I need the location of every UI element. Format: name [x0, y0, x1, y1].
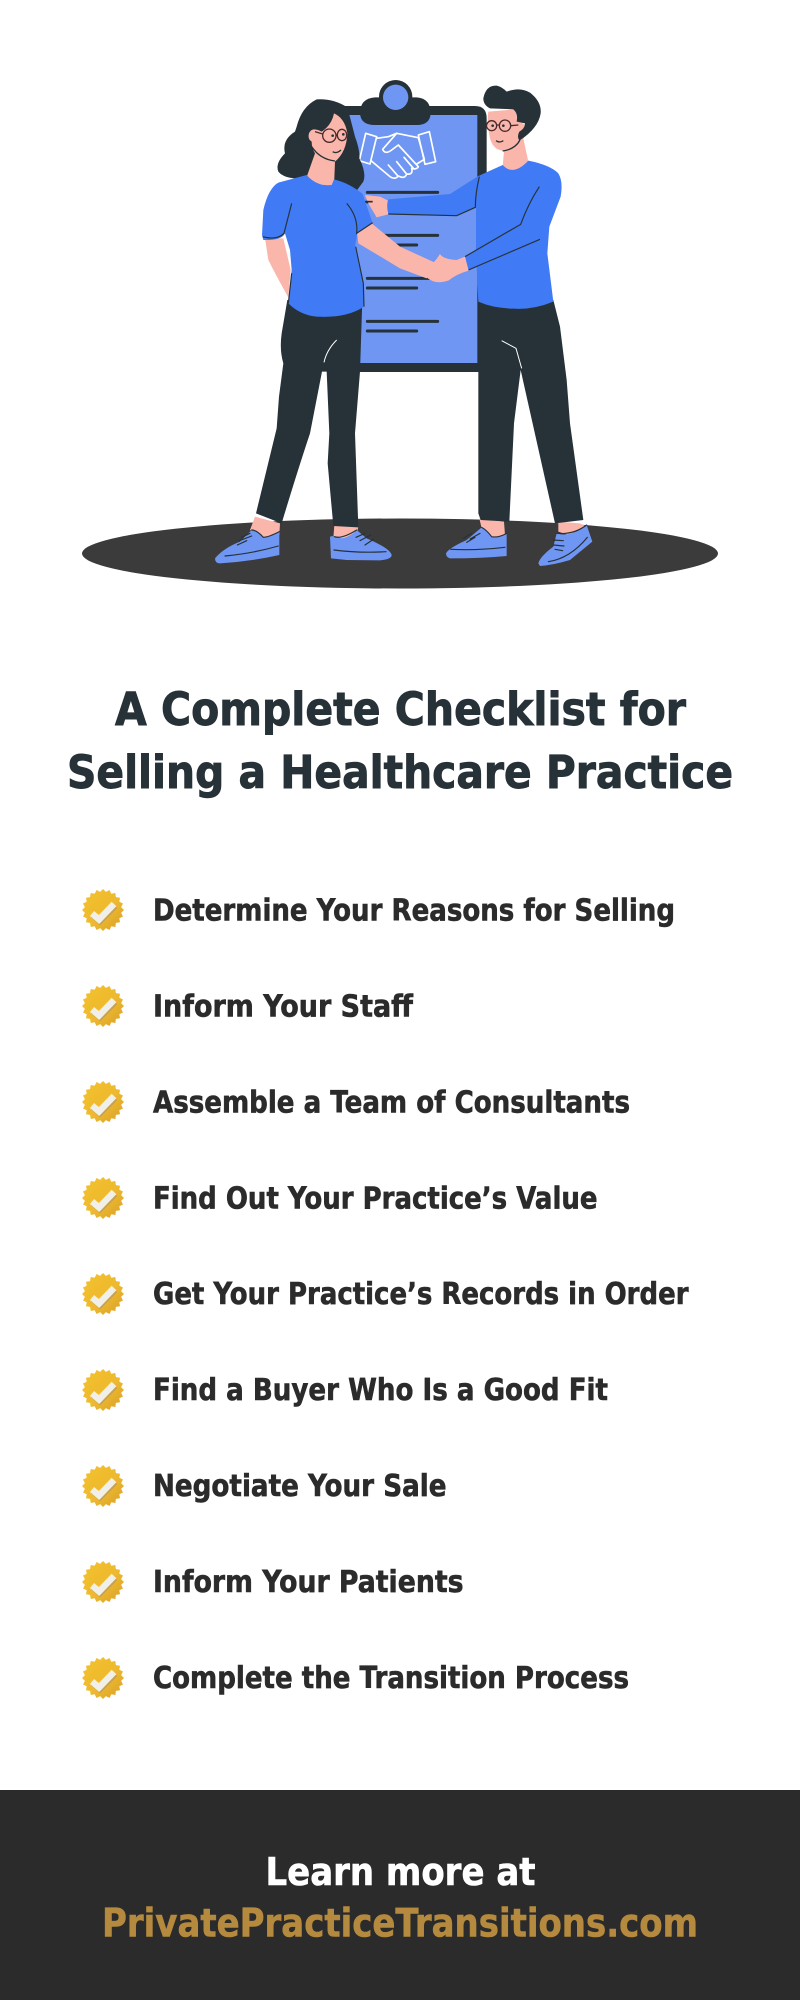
item 4	[82, 1177, 598, 1219]
item 8: Inform Your Patients	[153, 1565, 464, 1600]
item 3	[82, 1081, 630, 1123]
woman neck and face	[305, 113, 347, 187]
man neck and face	[488, 109, 528, 173]
woman glasses and face lines	[312, 129, 347, 161]
checklist	[82, 889, 689, 1699]
woman hair	[277, 99, 364, 191]
legs and shoes	[215, 300, 592, 566]
footer band	[0, 1790, 800, 2000]
item 9	[82, 1657, 629, 1699]
man shirt and arms	[387, 161, 562, 309]
woman shirt	[262, 175, 373, 317]
man glasses and face lines	[487, 120, 520, 151]
item 1	[82, 889, 675, 931]
item 6: Find a Buyer Who Is a Good Fit	[153, 1373, 608, 1408]
ground ellipse	[82, 518, 718, 588]
woman outstretched arm	[357, 223, 435, 278]
clipboard	[340, 80, 487, 372]
woman figure	[262, 99, 435, 317]
footer call to action: Learn more at	[266, 1850, 536, 1894]
clipboard text lines	[367, 192, 438, 331]
ankles	[250, 517, 587, 540]
man figure	[365, 86, 562, 309]
item 6	[82, 1369, 608, 1411]
clasped hands	[424, 254, 469, 282]
title	[67, 683, 733, 799]
woman trousers	[256, 300, 362, 527]
item 3: Assemble a Team of Consultants	[153, 1086, 630, 1120]
item 7	[82, 1465, 446, 1507]
footer website: PrivatePracticeTransitions.com	[102, 1902, 698, 1947]
handshake icon	[359, 132, 436, 178]
item 5: Get Your Practice’s Records in Order	[153, 1277, 689, 1312]
shoes	[215, 525, 592, 566]
title: Selling a Healthcare Practice	[67, 746, 733, 799]
clipboard clip	[360, 80, 431, 125]
item 2: Inform Your Staff	[153, 990, 414, 1025]
woman hanging arm	[265, 238, 291, 297]
illustration: two people shaking hands in front of a clipboard	[82, 80, 718, 588]
man trousers	[478, 300, 583, 523]
item 5	[82, 1273, 689, 1315]
man hand on shoulder	[365, 195, 390, 217]
item 4: Find Out Your Practice’s Value	[153, 1181, 598, 1216]
item 2	[82, 985, 414, 1027]
item 8	[82, 1561, 464, 1603]
man hair	[483, 86, 541, 141]
item 7: Negotiate Your Sale	[153, 1469, 446, 1504]
item 9: Complete the Transition Process	[153, 1661, 629, 1696]
item 1: Determine Your Reasons for Selling	[153, 894, 675, 929]
title: A Complete Checklist for	[115, 683, 687, 736]
